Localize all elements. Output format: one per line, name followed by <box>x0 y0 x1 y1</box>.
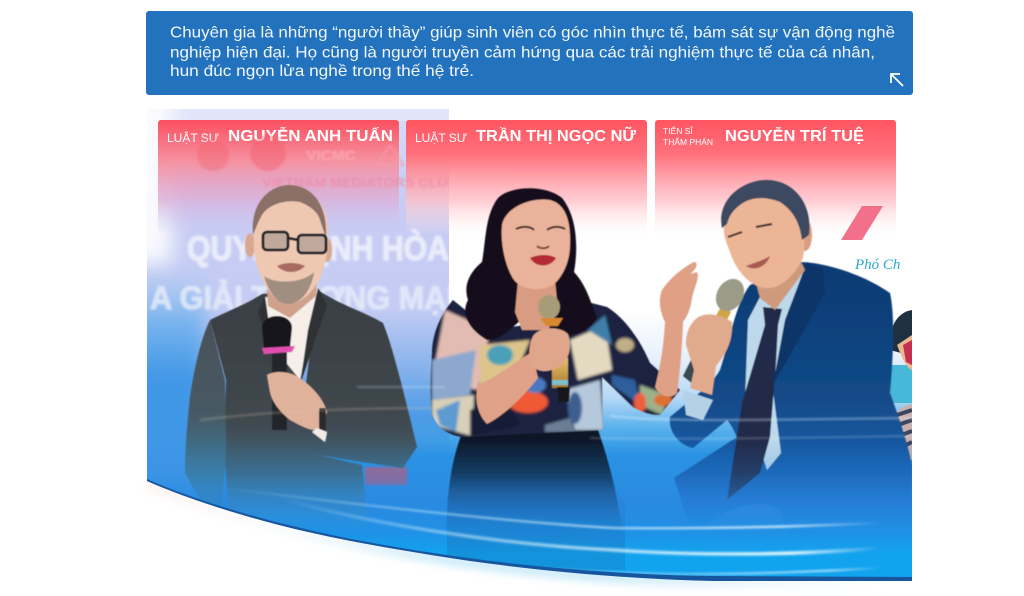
name card: Trần Thị Ngọc Nữ: LUẬT SƯ <box>415 130 467 145</box>
icon: arrow up-left <box>891 74 903 86</box>
light streaks <box>224 488 880 574</box>
name card: Trần Thị Ngọc Nữ: TRẦN THỊ NGỌC NỮ <box>476 125 637 145</box>
header text box <box>146 11 913 95</box>
raised arm <box>655 262 698 397</box>
person: Trần Thị Ngọc Nữ <box>430 187 698 524</box>
photo scene <box>120 95 912 590</box>
tie <box>727 307 782 500</box>
skirt <box>447 430 620 524</box>
person: Nguyễn Anh Tuấn <box>185 185 417 530</box>
blurred backdrop banner text: A GIẢI THƯƠNG MẠI <box>150 280 455 316</box>
person: Nguyễn Trí Tuệ <box>669 179 912 510</box>
intro text: Chuyên gia là những “người thầy” giúp sinh viên có góc nhìn thực tế, bám sát sự vận động nghề <box>170 24 895 42</box>
intro text: nghiệp hiện đại. Họ cũng là người truyền cảm hứng qua các trải nghiệm thực tế của cá nhân, <box>170 44 875 62</box>
neck <box>515 280 558 330</box>
glasses <box>263 232 326 253</box>
facial features <box>746 256 770 268</box>
bottom blue fade <box>147 440 912 590</box>
lower arm <box>476 352 538 424</box>
left lilac backdrop <box>147 109 449 491</box>
name card: Nguyễn Trí Tuệ: NGUYỄN TRÍ TUỆ <box>725 126 864 145</box>
left arm <box>185 320 226 510</box>
microphone <box>695 305 731 358</box>
name card: Trần Thị Ngọc Nữ <box>406 120 647 235</box>
lapel <box>773 262 825 385</box>
blurred backdrop banner text: VICMC <box>306 147 356 163</box>
hand <box>529 328 570 371</box>
hand <box>686 314 732 395</box>
shirt cuff <box>683 390 713 420</box>
intro text <box>170 24 895 80</box>
microphone <box>262 316 292 348</box>
ears <box>245 233 255 257</box>
blouse <box>425 296 690 441</box>
shirt <box>265 290 318 380</box>
blurred backdrop banner text: VIETNAM MEDIATORS CLUB <box>262 176 458 190</box>
soft glow below the curve <box>147 484 912 584</box>
microphone <box>552 358 568 388</box>
intro text: hun đúc ngọn lửa nghề trong thế hệ trẻ. <box>170 63 474 80</box>
face <box>724 193 804 288</box>
face <box>254 190 328 304</box>
name card: Nguyễn Anh Tuấn <box>158 120 399 235</box>
backdrop details right: Phó Ch <box>854 257 900 273</box>
hair <box>465 188 597 340</box>
hand <box>267 372 327 430</box>
blurred backdrop banner text: QUYẾT ĐỊNH HÒA <box>187 230 449 268</box>
shirt <box>745 267 807 470</box>
jacket body <box>210 290 368 530</box>
name card: Nguyễn Trí Tuệ: THẨM PHÁN <box>663 136 713 147</box>
facial features <box>530 255 556 266</box>
name card: Nguyễn Trí Tuệ: TIẾN SĨ <box>663 126 693 136</box>
mid-height light lines <box>200 387 912 439</box>
beard <box>264 272 314 304</box>
name card: Nguyễn Trí Tuệ <box>655 120 896 235</box>
suit <box>669 261 912 510</box>
name card: Nguyễn Anh Tuấn: NGUYỄN ANH TUẤN <box>228 126 393 145</box>
blurred backdrop banner text <box>150 135 458 316</box>
curved blue edge <box>147 479 912 581</box>
neck <box>756 262 806 310</box>
hair <box>253 185 326 238</box>
hair <box>721 180 810 240</box>
ear <box>803 222 813 252</box>
name card: Nguyễn Anh Tuấn: LUẬT SƯ <box>167 130 219 145</box>
backdrop details right <box>841 206 912 460</box>
face <box>502 200 570 289</box>
lower cuff <box>700 504 788 540</box>
neck <box>266 284 318 318</box>
